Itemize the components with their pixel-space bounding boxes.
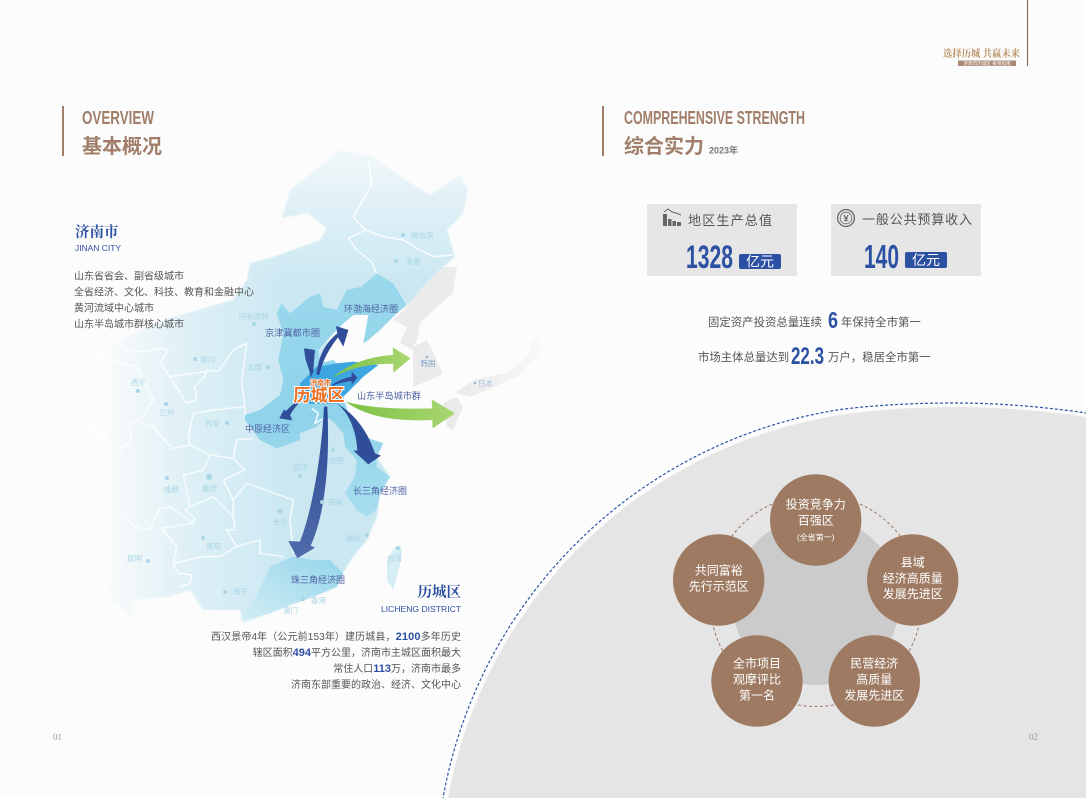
region labels: 长三角经济圈 [353, 485, 407, 496]
city labels: 兰州 [159, 407, 174, 417]
city markers [136, 233, 405, 601]
city labels: 福州 [346, 534, 361, 543]
node: private economy: 发展先进区 [844, 688, 904, 702]
unit badge [905, 252, 947, 268]
description paragraph: 济南东部重要的政治、经济、文化中心 [291, 678, 461, 691]
unit badge: 亿元 [746, 254, 774, 270]
node: private economy [829, 635, 920, 727]
heading: Licheng: 历城区 [418, 584, 461, 601]
city labels: 南宁 [233, 586, 248, 596]
node: investment competitiveness: (全省第一) [797, 532, 835, 542]
description list: 全省经济、文化、科技、教育和金融中心 [74, 286, 254, 298]
city labels: 西安 [205, 418, 220, 428]
logo top right [943, 0, 1028, 67]
node: city project review: 全市项目 [733, 656, 781, 670]
heading: overview: OVERVIEW [82, 108, 154, 128]
city labels: 澳门 [283, 605, 298, 615]
city labels: 太原 [247, 362, 262, 372]
node: investment competitiveness: 投资竞争力 [786, 496, 846, 512]
description paragraph: 西汉景帝4年（公元前153年）建历城县，2100多年历史 [211, 630, 461, 643]
node: investment competitiveness [770, 474, 861, 566]
node: county economy: 县域 [901, 556, 925, 570]
heading: comprehensive strength: 2023年 [709, 144, 738, 156]
city labels: 长春 [406, 256, 421, 266]
label: Jinan small orange: 济南市 [310, 378, 331, 387]
arrow: to Bohai Rim [317, 326, 348, 375]
city labels: 香港 [311, 595, 326, 605]
panel: GDP stat card [647, 204, 797, 276]
icon: Taiwan island [387, 547, 402, 590]
text: market entities: 22.3 [791, 343, 824, 370]
icon: yen coin [838, 210, 854, 226]
arrows radiating from Licheng [279, 326, 455, 558]
english caption: Jinan City: JINAN CITY [75, 243, 121, 253]
text: fixed asset investment [708, 307, 921, 333]
city labels: 台湾 [387, 553, 402, 563]
node: city project review: 观摩评比 [733, 672, 781, 686]
unit badge [739, 254, 781, 270]
text: market entities: 万户，稳居全市第一 [828, 350, 931, 364]
description paragraph: 常住人口113万，济南市最多 [333, 662, 461, 675]
region labels: 山东半岛城市群 [357, 390, 421, 401]
arrow: to Yangtze River Delta [337, 403, 381, 464]
text: market entities: 市场主体总量达到 [698, 350, 789, 364]
diagram: five honours [673, 474, 958, 727]
city labels: 昆明 [127, 554, 142, 563]
city labels [127, 230, 434, 615]
text: fixed asset investment: 6 [828, 307, 838, 333]
text block: Jinan City [74, 223, 254, 330]
english caption: Licheng District: LICHENG DISTRICT [381, 604, 461, 614]
heading: comprehensive strength: 综合实力 [624, 134, 704, 158]
label: Korea: 韩国 [420, 358, 436, 368]
arrow: to Beijing-Tianjin-Hebei [304, 348, 315, 377]
label: public budget revenue: 一般公共预算收入 [862, 212, 972, 227]
page number 01: 01 [53, 732, 62, 742]
node: common prosperity [673, 534, 764, 626]
panel: public budget stat card [831, 204, 981, 276]
city labels: 银川 [200, 355, 215, 364]
text: fixed asset investment: 年保持全市第一 [841, 315, 921, 329]
region labels [245, 303, 421, 585]
node: county economy: 经济高质量 [883, 570, 943, 586]
region labels: 环渤海经济圈 [344, 303, 398, 314]
text: fixed asset investment: 固定资产投资总量连续 [708, 315, 822, 329]
city labels: 合肥 [329, 455, 344, 465]
description paragraph: 辖区面积494平方公里，济南市主城区面积最大 [253, 646, 461, 659]
heading: Jinan: 济南市 [75, 223, 119, 241]
node: common prosperity: 先行示范区 [689, 580, 749, 594]
description paragraph [211, 630, 461, 691]
region labels: 京津冀都市圈 [265, 327, 320, 338]
arrow: to Central Plains [279, 402, 298, 420]
city labels: 长沙 [273, 517, 288, 527]
value: 140: 140 [864, 238, 899, 275]
node: investment competitiveness: 百强区 [798, 514, 834, 528]
page number 02: 02 [1029, 732, 1038, 742]
city labels: 南昌 [328, 497, 343, 507]
city labels: 贵阳 [206, 541, 221, 551]
node: private economy: 高质量 [856, 672, 892, 686]
label: Licheng district orange: 历城区 [294, 385, 344, 405]
label: GDP: 地区生产总值 [688, 213, 772, 228]
region labels: 中原经济区 [245, 423, 290, 434]
text block: Licheng District [211, 584, 461, 691]
city labels: 成都 [164, 484, 179, 494]
description list: 山东半岛城市群核心城市 [74, 318, 184, 330]
label: Japan: 日本 [478, 378, 493, 388]
heading: overview [62, 106, 162, 158]
city labels: 西宁 [131, 377, 146, 387]
region labels: 珠三角经济圈 [291, 574, 345, 585]
heading: overview: 基本概况 [82, 135, 162, 158]
description list: 黄河流域中心城市 [74, 302, 154, 314]
icon: bar chart [663, 209, 681, 226]
heading: comprehensive strength: COMPREHENSIVE STRENGTH [624, 108, 805, 128]
node: county economy: 发展先进区 [883, 586, 943, 601]
city labels: 重庆 [202, 483, 217, 493]
arrow: to Pearl River Delta [288, 407, 328, 558]
panel: grey arc background [441, 403, 1086, 798]
map of eastern China with economic zones [90, 130, 540, 623]
description list [74, 270, 254, 330]
node: city project review: 第一名 [739, 688, 775, 702]
icon: Japan islands [443, 337, 540, 430]
heading: comprehensive strength [602, 106, 805, 158]
city labels: 哈尔滨 [411, 230, 434, 240]
node: city project review [711, 635, 803, 727]
city labels: 呼和浩特 [239, 311, 269, 321]
node: common prosperity: 共同富裕 [695, 562, 743, 578]
icon: Korea peninsula [393, 267, 457, 387]
arrow: to Japan [346, 399, 455, 428]
description list: 山东省省会、副省级城市 [74, 270, 184, 282]
logo top right: 选择历城 共赢未来 [943, 47, 1020, 60]
arrow: to Shandong Peninsula [332, 372, 357, 386]
city labels: 武汉 [293, 462, 308, 472]
value: 1328: 1328 [686, 239, 733, 275]
logo top right: 济南市历城区 投资指南 [963, 60, 1011, 67]
node: county economy [867, 534, 958, 626]
arrow: to Korea [332, 347, 411, 378]
unit badge: 亿元 [912, 252, 940, 268]
label: Japan [474, 378, 493, 388]
icon: yen coin: ¥ [843, 214, 849, 224]
node: private economy: 民营经济 [850, 656, 898, 670]
text: market entities [698, 343, 931, 370]
